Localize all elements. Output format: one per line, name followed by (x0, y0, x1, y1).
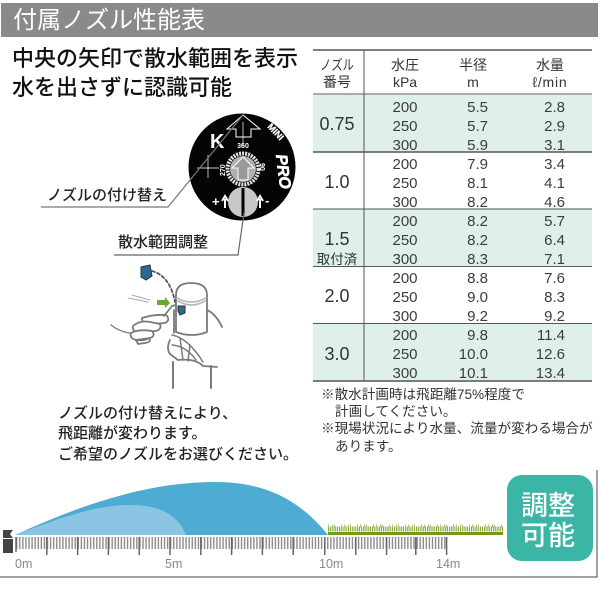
pressure values: 300 (392, 137, 418, 154)
radius values: 8.8 (467, 270, 488, 287)
nozzle numbers: 0.75 (319, 114, 355, 134)
ruler labels (15, 557, 460, 571)
water volume values: 3.4 (544, 156, 565, 173)
full spray arc (15, 482, 328, 535)
water volume values (536, 99, 565, 382)
ruler labels: 5m (165, 557, 182, 571)
logo text (266, 122, 293, 190)
dial: 270 (220, 164, 227, 176)
radius values: 8.2 (467, 194, 488, 211)
table header: 半径 (459, 57, 487, 73)
water volume values: 11.4 (537, 327, 565, 344)
icon: blue nozzle attached (178, 306, 185, 315)
caption: 飛距離が変わります。 (58, 424, 207, 442)
pressure values: 250 (392, 232, 418, 249)
water volume values: 3.1 (544, 137, 565, 154)
radius values: 5.7 (467, 118, 488, 135)
icon: hand holding nozzle (111, 325, 130, 333)
ruler (16, 537, 447, 555)
panel: nozzle performance table (313, 50, 592, 382)
icon: K mark: K (210, 131, 225, 153)
water volume values: 2.9 (544, 118, 565, 135)
callout: spray range adjustment: 散水範囲調整 (118, 233, 208, 251)
pipe (173, 362, 211, 388)
spray range chart (0, 470, 597, 577)
nozzle numbers: 1.5 (324, 229, 350, 249)
dial: 360 (237, 143, 249, 150)
notes: あります。 (335, 439, 402, 454)
radius values: 9.2 (467, 308, 488, 325)
reduced spray arc (15, 505, 186, 535)
table header: kPa (393, 74, 417, 90)
headline: 中央の矢印で散水範囲を表示 (12, 46, 298, 71)
notes: ※現場状況により水量、流量が変わる場合が (321, 421, 593, 436)
dial (220, 143, 265, 184)
grass (328, 526, 503, 535)
icon: blue nozzle loose (141, 265, 152, 280)
table header: 水量 (536, 57, 564, 73)
pressure values: 250 (392, 118, 418, 135)
radius values: 8.3 (467, 251, 488, 268)
table shaded rows (313, 95, 592, 381)
water volume values: 8.3 (544, 289, 565, 306)
pressure values: 300 (392, 251, 418, 268)
nozzle numbers: 1.0 (324, 172, 350, 192)
pressure values: 200 (392, 213, 418, 230)
water volume values: 6.4 (544, 232, 565, 249)
callout: nozzle replacement: ノズルの付け替え (47, 186, 167, 204)
radius values: 7.9 (467, 156, 488, 173)
callout: spray range adjustment (114, 213, 244, 255)
logo text: PRO (272, 153, 293, 190)
water volume values: 7.6 (544, 270, 565, 287)
pressure values: 300 (392, 365, 418, 382)
adjustment screw: - (265, 193, 269, 208)
icon: lower hand on pipe (168, 310, 217, 367)
water volume values: 2.8 (544, 99, 565, 116)
radius values: 9.8 (467, 327, 488, 344)
nozzle numbers: 取付済 (317, 252, 358, 267)
table header: 水圧 (391, 57, 419, 73)
nozzle numbers: 3.0 (324, 344, 350, 364)
table rules (313, 50, 592, 381)
radius values: 8.1 (467, 175, 488, 192)
icon: sprinkler body (176, 283, 207, 335)
notes: ※散水計画時は飛距離75%程度で (321, 387, 525, 402)
outline arrow at top (227, 115, 260, 137)
illustration: replacing nozzle by hand (111, 271, 222, 388)
pressure values: 250 (392, 175, 418, 192)
outer frame lines (0, 470, 597, 577)
ruler labels: 14m (436, 557, 460, 571)
table header: ℓ/min (533, 74, 567, 90)
pressure values: 250 (392, 346, 418, 363)
badge: adjustable: 調整 (521, 491, 575, 521)
water volume values: 13.4 (536, 365, 565, 382)
pressure values: 300 (392, 194, 418, 211)
notes (321, 387, 593, 454)
logo text: MINI (266, 122, 286, 142)
headline (12, 46, 298, 100)
table header: ノズル (320, 57, 354, 73)
notes: 計画してください。 (335, 404, 457, 419)
adjustment screw: + (212, 194, 220, 209)
radius values: 9.0 (467, 289, 488, 306)
radius values (459, 99, 488, 382)
title bar: 付属ノズル性能表 (13, 7, 205, 34)
caption (58, 404, 298, 463)
water volume values: 4.6 (544, 194, 565, 211)
pressure values: 250 (392, 289, 418, 306)
radius values: 10.0 (459, 346, 488, 363)
water volume values: 4.1 (544, 175, 565, 192)
pressure values: 200 (392, 99, 418, 116)
water volume values: 7.1 (544, 251, 565, 268)
radius values: 8.2 (467, 213, 488, 230)
table header: 番号 (323, 74, 351, 90)
pressure values: 200 (392, 270, 418, 287)
dial: 90 (258, 163, 265, 171)
nozzle top diagram (188, 114, 296, 220)
icon: green arrow (157, 297, 170, 308)
water volume values: 5.7 (544, 213, 565, 230)
caption: ノズルの付け替えにより、 (58, 404, 237, 422)
badge: adjustable: 可能 (521, 521, 575, 551)
pressure values: 200 (392, 156, 418, 173)
caption: ご希望のノズルをお選びください。 (58, 445, 298, 463)
radius values: 5.9 (467, 137, 488, 154)
water volume values: 12.6 (536, 346, 565, 363)
table header: m (467, 74, 479, 90)
nozzle numbers: 2.0 (324, 286, 350, 306)
ruler labels: 10m (319, 557, 343, 571)
water volume values: 9.2 (544, 308, 565, 325)
sprinkler head icon (3, 530, 13, 553)
headline: 水を出さずに認識可能 (12, 75, 232, 100)
ruler labels: 0m (15, 557, 32, 571)
radius values: 10.1 (459, 365, 488, 382)
pressure values: 200 (392, 327, 418, 344)
radius values: 5.5 (467, 99, 488, 116)
pressure values (392, 99, 418, 382)
title bar (1, 3, 598, 37)
badge: adjustable (507, 475, 593, 561)
pressure values: 300 (392, 308, 418, 325)
radius values: 8.2 (467, 232, 488, 249)
callout: nozzle replacement (41, 115, 243, 207)
table header (320, 57, 567, 90)
adjustment screw (212, 187, 269, 217)
nozzle numbers (317, 114, 358, 364)
dashed path of nozzle (152, 271, 175, 302)
